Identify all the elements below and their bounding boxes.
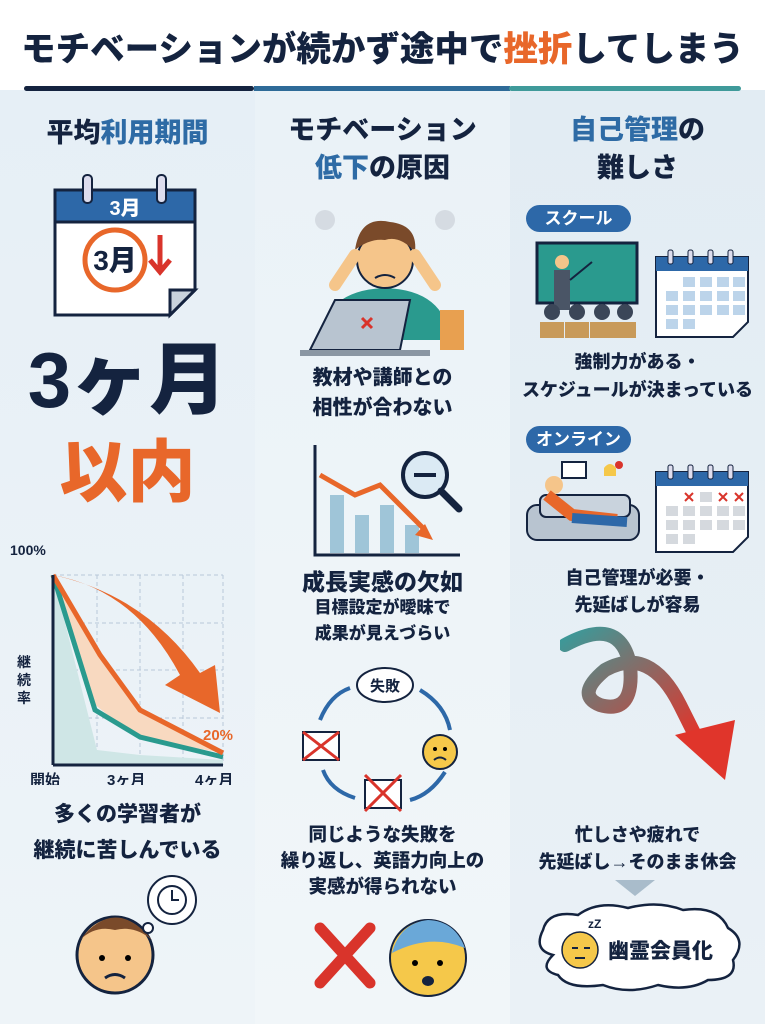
chart: retention: 継	[17, 654, 31, 670]
text: repeated failure	[280, 824, 484, 897]
icon: couch person	[526, 461, 640, 541]
text: school structure: 強制力がある・	[574, 352, 700, 372]
icon: calendar: 3月	[109, 198, 141, 220]
title: モチベーションが続かず途中で挫折してしまう	[21, 31, 744, 69]
text: online self management	[566, 568, 710, 615]
callout: ghost membership: 幽霊会員化	[608, 940, 713, 963]
heading: 難しさ	[597, 153, 678, 183]
icon: worried face	[76, 875, 197, 994]
text: school structure	[522, 352, 753, 400]
panel: average usage period	[10, 118, 233, 994]
text: online self management: 先延ばしが容易	[574, 595, 700, 615]
text: busy and tired: 先延ばし→そのまま休会	[538, 852, 736, 872]
icon: spiral arrow	[560, 626, 735, 780]
panel: causes of motivation decline: 目標設定が曖昧で	[314, 598, 450, 617]
pill: online: オンライン	[536, 430, 621, 449]
text: repeated failure: 繰り返し、英語力向上の	[281, 850, 484, 871]
icon: stressed person	[300, 210, 464, 356]
big number: 3ヶ月	[28, 336, 227, 424]
text: busy and tired	[538, 825, 736, 872]
text: school structure: スケジュールが決まっている	[522, 380, 753, 400]
chart: retention: 率	[17, 690, 31, 706]
panel: difficulty of self-management	[522, 115, 753, 992]
chart: retention: 100%	[10, 542, 46, 558]
callout: ghost membership	[538, 903, 741, 992]
icon: calendar: 3月	[93, 245, 137, 276]
panel: causes of motivation decline	[280, 115, 484, 997]
icon: failure cycle	[302, 667, 458, 812]
icon: classroom	[536, 242, 638, 338]
panel: average usage period: 以内	[59, 435, 196, 511]
text: struggling learners: 継続に苦しんでいる	[34, 839, 221, 862]
text: repeated failure: 実感が得られない	[308, 876, 456, 897]
icon: declining chart with magnifier	[314, 445, 462, 556]
panel: causes of motivation decline: 成果が見えづらい	[315, 624, 450, 643]
pill: school	[526, 205, 631, 232]
text: busy and tired: 忙しさや疲れで	[575, 825, 700, 845]
callout: ghost membership: zZ	[588, 917, 601, 931]
heading: 平均利用期間	[46, 118, 208, 148]
icon: cross and sweat face	[314, 919, 467, 997]
text: repeated failure: 同じような失敗を	[308, 824, 456, 845]
heading: 自己管理の	[570, 115, 705, 145]
text: lack of growth: 成長実感の欠如	[302, 569, 463, 595]
heading: モチベーション	[288, 115, 477, 145]
chart: retention: 20%	[203, 727, 233, 744]
text: online self management: 自己管理が必要・	[566, 568, 710, 588]
text: mismatch: 相性が合わない	[312, 397, 452, 419]
text: struggling learners: 多くの学習者が	[54, 803, 201, 826]
heading: 低下の原因	[315, 153, 450, 183]
icon: calendar with checks	[655, 250, 749, 338]
icon: down triangle	[615, 880, 655, 896]
icon: failure cycle: 失敗	[370, 677, 400, 695]
text: mismatch	[312, 366, 452, 419]
icon: calendar with crosses	[655, 464, 749, 553]
text: mismatch: 教材や講師との	[313, 367, 452, 389]
chart: retention: 続	[17, 672, 31, 688]
heading	[570, 115, 705, 183]
icon: calendar	[54, 174, 198, 318]
chart: retention	[10, 542, 233, 785]
pill: school: スクール	[544, 209, 612, 228]
heading	[288, 115, 477, 183]
pill: online	[526, 426, 631, 453]
text: struggling learners	[34, 802, 221, 862]
